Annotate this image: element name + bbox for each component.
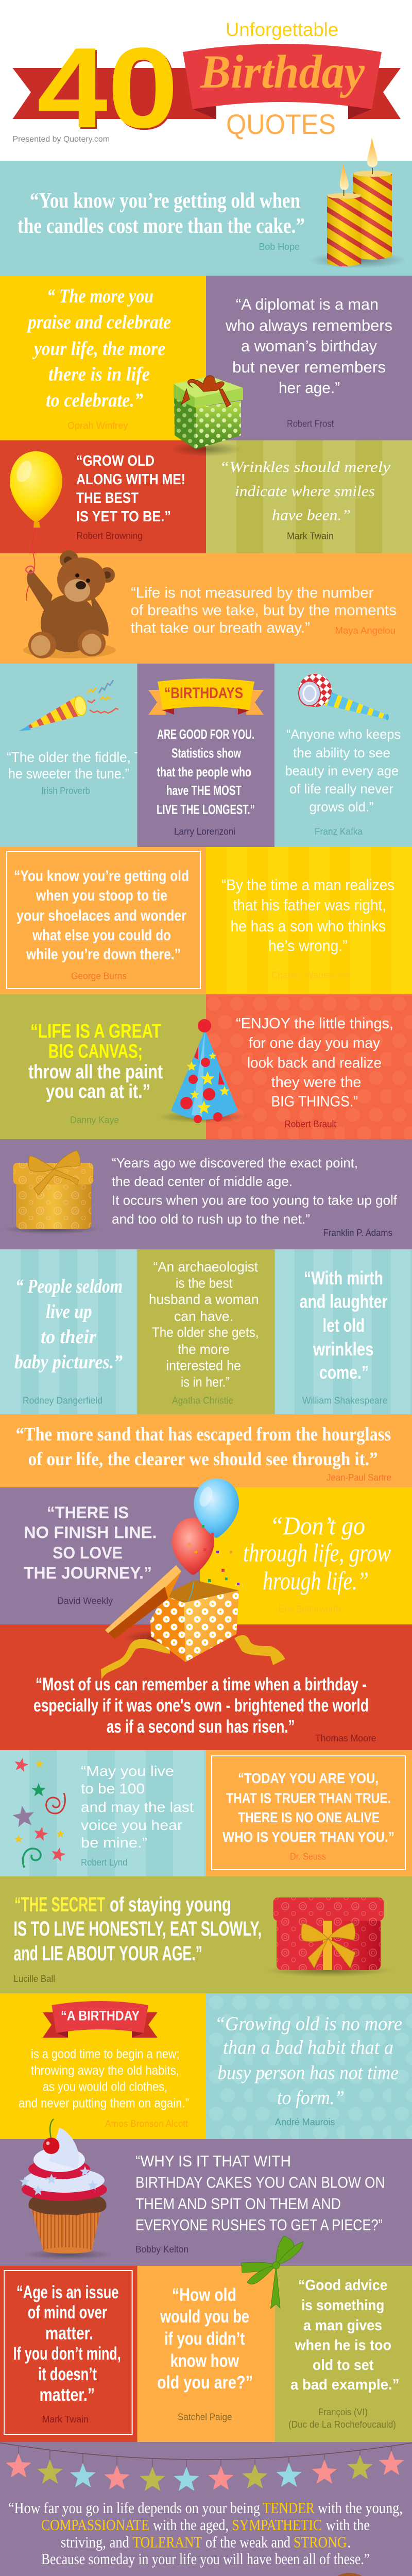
panel: Rodney Dangerfield [0,1249,138,1414]
quote: SO LOVE [53,1544,123,1562]
quote [19,2047,189,2111]
quote: her age.” [279,379,340,397]
title number: 40: 40 [37,24,178,152]
ribbon [148,679,264,715]
quote: when you stoop to tie [36,887,167,904]
attribution: Lucille Ball [13,1974,55,1984]
quote: THEM AND SPIT ON THEM AND [135,2195,341,2213]
quote [131,585,397,636]
quote: husband a woman [149,1292,259,1307]
quote: they were the [271,1074,362,1091]
quote [215,2013,402,2109]
quote: it doesn’t [38,2364,97,2384]
title: Birthday: Birthday [200,45,365,98]
attribution: Dr. Seuss [290,1852,326,1862]
icon: candles [309,138,407,268]
quote: busy person has not time [217,2062,399,2083]
quote [157,726,255,817]
icon: open gift with balloons [101,1479,285,1680]
quote: ARE GOOD FOR YOU. [157,726,254,742]
quote: old to set [313,2357,374,2374]
decoration: stars and swirls [11,1756,66,1868]
quote: “Anyone who keeps [286,726,401,742]
panel: William Shakespeare [275,1249,412,1414]
quote: let old [322,1315,365,1336]
quote [285,726,401,815]
quote: “TODAY YOU ARE YOU, [238,1770,379,1786]
quote: TENDER [263,2499,315,2517]
quote: the ability to see [293,745,390,760]
title: QUOTES: QUOTES [226,108,336,140]
panel: George Washington Carver [0,2442,412,2576]
quote: THE JOURNEY.” [24,1564,152,1582]
quote [76,453,185,525]
quote: as if a second sun has risen.” [107,1717,295,1737]
quote: to be 100 [81,1781,145,1797]
quote: the candles cost more than the cake.” [18,214,305,238]
quote: to celebrate.” [46,389,143,411]
quote: THE BEST [76,490,139,506]
quote: “ People seldom [15,1276,123,1297]
quote [24,1503,157,1582]
icon: teddy bear with 15 badge [306,2573,394,2576]
quote: baby pictures.” [14,1351,123,1373]
quote: LIVE THE LONGEST.” [157,802,255,817]
panel: George Burns [0,847,206,994]
quote: that take our breath away.” [131,620,310,636]
quote: can have. [174,1309,233,1324]
icon: party horn [19,680,118,731]
quote: “How old [172,2285,236,2305]
panel: Robert Brault [206,994,412,1139]
quote [112,1155,398,1227]
attribution: George Burns [71,971,127,981]
panel: Amos Bronson Alcott [0,1993,206,2139]
quote: BIG THINGS.” [271,1093,358,1110]
quote: . [347,2533,351,2551]
quote: your life, the more [32,338,165,360]
quote: TOLERANT [133,2533,202,2551]
attribution [288,2407,396,2430]
quote: and laughter [300,1291,388,1312]
panel: Satchel Paige [137,2266,275,2442]
quote: wrinkles [313,1338,374,1360]
quote: with the [326,2516,370,2534]
quote: throwing away the old habits, [31,2063,179,2078]
quote: of staying young [110,1893,231,1916]
quote [13,2282,121,2405]
quote: “Age is an issue [16,2282,119,2302]
quote: “Wrinkles should merely [219,459,391,476]
quote [14,868,189,963]
attribution: William Shakespeare [302,1395,387,1405]
panel: Maya Angelou [0,553,412,664]
quote: indicate where smiles [235,483,375,500]
quote: “You know you’re getting old [14,868,189,885]
panel: Thomas Moore [0,1624,412,1750]
quote: a woman’s birthday [241,337,377,355]
quote: striving, and [61,2533,129,2551]
presented by: Presented by Quotery.com [12,135,110,144]
quote: THERE IS NO ONE ALIVE [238,1809,380,1825]
icon: gold gift [3,1150,100,1234]
quote [300,1267,388,1383]
quote [221,876,394,955]
quote: is in her.” [181,1375,230,1390]
attribution: Franz Kafka [315,826,363,837]
quote: he has a son who thinks [231,917,386,935]
quote: live up [46,1301,92,1323]
quote: STRONG [294,2533,347,2551]
panel: Mark Twain age [0,2266,138,2442]
quote: NO FINISH LINE. [24,1523,157,1541]
ribbon text: “BIRTHDAYS [164,685,243,702]
attribution: Robert Frost [287,418,334,429]
attribution: André Maurois [275,2117,335,2127]
quote: he sweeter the tune.” [8,766,129,782]
quote: old you are?” [157,2372,253,2393]
attribution: (Duc de La Rochefoucauld) [288,2419,396,2430]
quote: be mine.” [81,1835,147,1851]
ribbon: folds [193,105,372,119]
attribution: Agatha Christie [172,1395,233,1405]
quote [7,749,143,782]
quote: “THE SECRET [14,1893,105,1916]
icon: party blower [299,674,389,720]
panel: Oprah Winfrey [0,276,206,440]
quote: a bad example.” [290,2377,400,2393]
quote: that his father was right, [233,896,386,914]
attribution: Danny Kaye [70,1115,119,1125]
quote: “May you live [81,1763,174,1779]
attribution: Franklin P. Adams [323,1228,392,1238]
quote: you can at it.” [46,1081,150,1103]
quote: have THE MOST [166,783,242,798]
attribution: Robert Lynd [81,1857,128,1868]
quote: interested he [166,1358,241,1374]
quote: of breaths we take, but by the moments [131,602,397,619]
quote [219,459,391,523]
quote: of the weak and [205,2533,290,2551]
attribution: Thomas Moore [315,1733,376,1743]
attribution: Rodney Dangerfield [23,1395,102,1405]
quote: of our life, the clearer we should see through it.” [28,1449,378,1470]
quote: “ENJOY the little things, [236,1015,393,1032]
quote: to their [41,1326,97,1348]
panel: Franklin P. Adams [0,1139,412,1249]
ribbon [43,2001,158,2038]
quote: It occurs when you are too young to take up golf [112,1192,398,1208]
quote [290,2277,400,2393]
quote: if you didn’t [164,2329,245,2349]
title number: 40: 40 [39,26,180,154]
quote: “Growing old is no more [215,2013,402,2035]
quote: and may the last [81,1799,194,1815]
quote highlight: “LIFE IS A GREAT [30,1021,161,1042]
quote: “By the time a man realizes [221,876,394,894]
panel: Bob Hope [0,138,412,276]
quote: throw all the paint [28,1061,163,1083]
attribution: Irish Proverb [41,786,90,796]
panel: Larry Lorenzoni [137,664,275,847]
quote [16,1424,391,1470]
quote: who always remembers [225,316,392,334]
quote: “A diplomat is a man [236,295,379,313]
quote: and never putting them on again.” [19,2096,189,2111]
quote: “Years ago we discovered the exact point, [112,1155,358,1171]
quote [26,285,171,411]
panel: Robert Frost [206,276,412,440]
bunting of stars [0,2443,412,2491]
quote: look back and realize [247,1055,382,1072]
icon: green bow [242,2236,303,2309]
quote: to form.” [277,2087,345,2109]
panel: Dr. Seuss [206,1750,412,1876]
quote: but never remembers [232,358,386,376]
quote: “ The more you [47,285,153,307]
quote: as you would old clothes, [43,2079,167,2094]
attribution: Bobby Kelton [135,2244,188,2255]
panel: François VI [275,2266,412,2442]
attribution: Maya Angelou [335,625,396,636]
attribution: Mark Twain [42,2414,89,2425]
quote: ALONG WITH ME! [76,471,185,488]
quote [8,2499,403,2568]
quote: If you don’t mind, [13,2344,121,2364]
quote: COMPASSIONATE [41,2516,149,2534]
quote: while you’re down there.” [26,946,181,963]
quote: there is in life [48,364,150,385]
attribution: Amos Bronson Alcott [105,2119,188,2129]
quote: have been.” [272,507,351,523]
attribution: François (VI) [318,2407,368,2417]
quote [236,1015,393,1110]
quote: and LIE ABOUT YOUR AGE.” [13,1942,202,1965]
quote: come.” [319,1362,369,1383]
panel: Lucille Ball [0,1876,412,1993]
quote: the dead center of middle age. [112,1174,293,1189]
quote: voice you hear [81,1817,182,1833]
quote: “How far you go in life depends on your being [8,2499,260,2517]
quote: IS TO LIVE HONESTLY, EAT SLOWLY, [13,1918,262,1940]
quote: “You know you’re getting old when [30,189,300,213]
ribbon: front banner [183,44,382,109]
panel: Robert Lynd [0,1750,206,1876]
attribution: David Weekly [57,1596,113,1606]
attribution: Robert Brault [284,1119,336,1129]
quote: with the aged, [153,2516,229,2534]
attribution: Mark Twain [287,531,334,541]
quote: when he is too [295,2337,391,2354]
quote [33,1674,369,1737]
quote: of mind over [28,2302,107,2323]
title: Unforgettable: Unforgettable [226,19,338,40]
attribution: Larry Lorenzoni [174,826,235,837]
quote: matter. [45,2324,93,2344]
quote [28,1061,163,1103]
quote [81,1763,194,1851]
quote: “An archaeologist [153,1259,258,1275]
panel: Eric Butterworth [200,1487,412,1624]
attribution: Charles Wadsworth [271,970,350,980]
quote: that the people who [157,764,251,779]
panel: Jean-Paul Sartre [0,1414,412,1487]
quote: for one day you may [249,1035,380,1052]
quote: a man gives [303,2317,382,2334]
icon: yellow balloon [10,451,62,601]
quote [157,2285,253,2393]
ribbon text: “A BIRTHDAY [61,2008,140,2024]
icon: cupcake with cherry [20,2119,112,2260]
ribbon: dark tails [12,68,401,119]
panel: Irish Proverb [0,664,143,847]
quote [18,189,305,238]
quote: “GROW OLD [76,453,154,469]
quote: “THERE IS [47,1503,129,1522]
quote: “Good advice [298,2277,387,2294]
quote: grows old.” [309,799,374,815]
quote: is the best [176,1276,233,1291]
attribution: Oprah Winfrey [67,420,128,431]
quote: the more [178,1342,230,1357]
quote: than a bad habit that a [223,2037,393,2059]
quote: “WHY IS IT THAT WITH [135,2152,291,2170]
icon: teddy bear with ribbon [23,550,116,658]
quote: IS YET TO BE.” [76,509,171,525]
quote: your shoelaces and wonder [16,907,186,924]
header [12,19,401,154]
attribution: Eric Butterworth [279,1604,341,1614]
quote: and too old to rush up to the net.” [112,1211,310,1227]
quote: what else you could do [32,927,171,944]
panel: Danny Kaye [0,994,206,1139]
quote [13,1893,262,1965]
quote: “Don’t go [270,1511,365,1540]
panel: David Weekly [0,1487,200,1624]
quote [222,1770,394,1845]
quote: praise and celebrate [26,311,171,333]
panel: Franz Kafka [274,664,412,847]
icon: green gift box [170,376,243,456]
quote: The older she gets, [152,1325,259,1340]
quote [243,1511,391,1595]
quote: matter.” [39,2385,95,2405]
quote: hrough life.” [263,1566,369,1595]
quote: “The older the fiddle, T [7,749,143,765]
quote: is a good time to begin a new; [31,2047,179,2061]
panel: Robert Browning [0,440,206,553]
icon: red gift [264,1897,393,1977]
panel: Agatha Christie [137,1249,275,1414]
icon: party hat [157,1019,250,1123]
panel: André Maurois [206,1993,412,2139]
quote: “Life is not measured by the number [131,585,374,601]
quote: of life really never [289,781,393,796]
panel: Charles Wadsworth [206,847,412,994]
quote [225,295,392,397]
quote: “With mirth [304,1267,383,1289]
attribution: Jean-Paul Sartre [327,1472,391,1483]
quote highlight: BIG CANVAS; [48,1041,143,1062]
quote: he’s wrong.” [268,937,347,955]
attribution: Satchel Paige [178,2412,232,2422]
panel: Mark Twain wrinkles [206,440,412,553]
quote: is something [301,2297,384,2314]
quote: would you be [160,2307,249,2327]
quote: beauty in every age [285,763,399,778]
quote: SYMPATHETIC [232,2516,322,2534]
quote: Statistics show [171,745,242,760]
quote [14,1276,123,1373]
attribution: Bob Hope [259,242,300,252]
quote [149,1259,259,1390]
quote [135,2152,385,2234]
quote highlight [30,1021,161,1062]
panel: Bobby Kelton [0,2119,412,2266]
attribution: Robert Browning [76,531,143,541]
quote: know how [170,2351,239,2371]
